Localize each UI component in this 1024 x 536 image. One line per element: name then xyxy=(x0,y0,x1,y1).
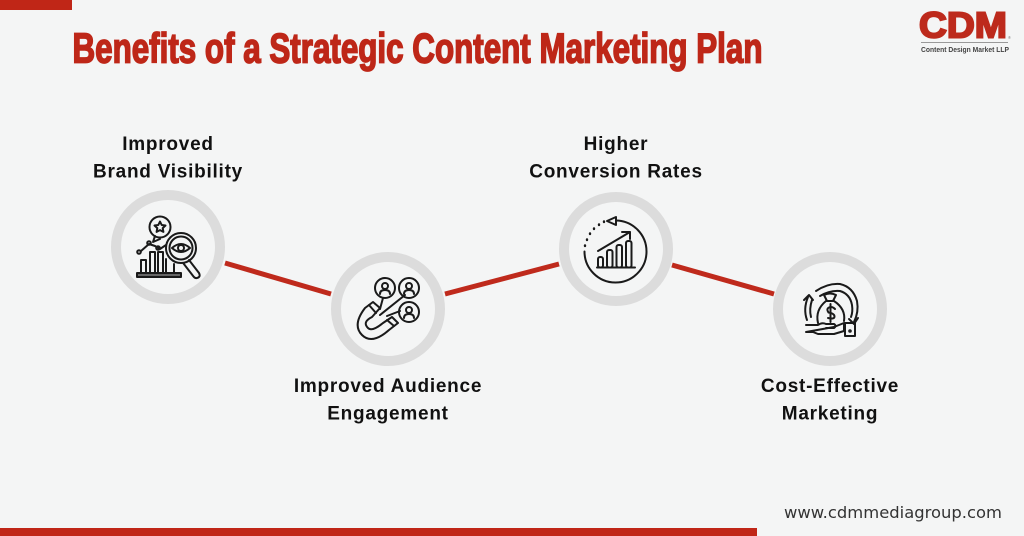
icon: magnet attracting people xyxy=(358,278,419,339)
bottom accent bar xyxy=(0,528,757,536)
label: Improved Brand Visibility: Brand Visibility xyxy=(93,162,243,182)
ring xyxy=(564,197,668,301)
logo: CDM: ® xyxy=(1008,35,1011,40)
label: Improved Audience Engagement: Engagement xyxy=(327,404,449,424)
ring xyxy=(336,257,440,361)
logo: CDM: Content Design Market LLP xyxy=(921,45,1009,54)
step 1: Improved Brand Visibility xyxy=(93,134,243,299)
title: Benefits of a Strategic Content Marketing Plan xyxy=(72,24,762,72)
step 4: Cost-Effective Marketing xyxy=(761,257,899,424)
ring xyxy=(116,195,220,299)
label: Improved Audience Engagement: Improved Audience xyxy=(294,376,482,397)
top-left accent bar xyxy=(0,0,72,10)
label: Improved Brand Visibility: Improved xyxy=(122,134,214,155)
connector: step 3 to step 4 xyxy=(672,265,774,294)
icon: money bag on hand with cycle arrows xyxy=(804,284,858,336)
website URL: www.cdmmediagroup.com xyxy=(784,503,1002,522)
step 3: Higher Conversion Rates xyxy=(529,134,703,301)
logo: CDM: CDM xyxy=(919,4,1007,46)
label: Higher Conversion Rates: Higher xyxy=(584,134,648,155)
icon: growth chart in circular arrow xyxy=(584,217,646,282)
ring xyxy=(778,257,882,361)
step 2: Improved Audience Engagement xyxy=(294,257,482,424)
connector: step 2 to step 3 xyxy=(445,264,559,294)
label: Cost-Effective Marketing: Marketing xyxy=(782,404,878,424)
label: Higher Conversion Rates: Conversion Rates xyxy=(529,162,703,182)
connector: step 1 to step 2 xyxy=(225,263,331,294)
label: Cost-Effective Marketing: Cost-Effective xyxy=(761,376,899,397)
icon: chart with magnifier and eye xyxy=(137,216,200,278)
